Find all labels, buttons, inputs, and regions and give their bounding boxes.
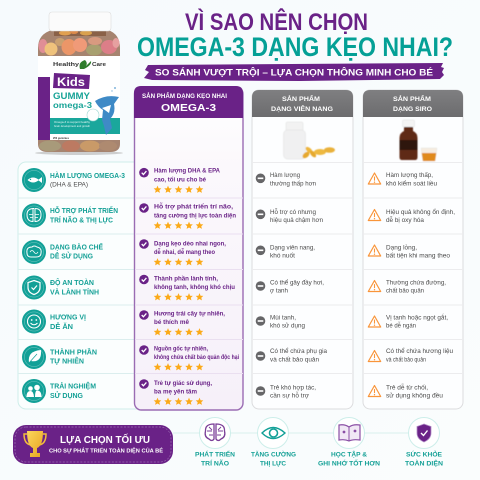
product image: gummy omega-3 jar: GUMMY <box>53 91 90 101</box>
rating: user experience: Trẻ tự giác sử dụng, <box>154 380 212 387</box>
benefit: overall health: SỨC KHỎE <box>406 450 443 458</box>
comparison: safety: ợ tanh <box>270 288 288 294</box>
comparison: brain and eye support: Hiệu quả không ổn định, <box>386 209 455 216</box>
benefit: learning and memory: HỌC TẬP & <box>331 450 367 458</box>
comparison: brain and eye support: dễ bị oxy hóa <box>386 217 425 224</box>
rating: natural ingredients: không chứa chất bảo quản độc hại <box>154 354 239 361</box>
comparison: safety: Có thể gây đầy hơi, <box>270 280 324 286</box>
icon: open book <box>339 425 360 441</box>
column heading <box>393 94 432 113</box>
feature: taste: HƯƠNG VỊ <box>50 314 86 322</box>
icon: fish <box>22 168 46 192</box>
comparison: omega-3 content: Hàm lượng <box>270 173 300 179</box>
feature: safety: VÀ LÀNH TÍNH <box>50 288 99 296</box>
feature: dosage form: DẠNG BÀO CHẾ <box>50 242 103 252</box>
rating: brain and eye support: Hỗ trợ phát triển trí não, <box>154 204 233 210</box>
comparison: user experience: Trẻ dễ từ chối, <box>386 384 428 392</box>
title: VÌ SAO NÊN CHỌN <box>185 8 368 36</box>
rating: brain and eye support: tăng cường thị lực toàn diện <box>154 212 236 220</box>
benefit: overall health <box>405 418 443 468</box>
feature: taste <box>22 310 86 334</box>
benefit: better eyesight <box>251 418 296 468</box>
benefit: brain development <box>195 418 235 468</box>
callout: best choice badge: LỰA CHỌN TỐI ƯU <box>60 432 150 446</box>
feature: brain and eye support <box>22 204 118 228</box>
feature: omega-3 content: (DHA & EPA) <box>50 182 88 188</box>
product image: gummy omega-3 jar: Healthy <box>53 62 80 68</box>
rating: omega-3 content <box>139 168 221 193</box>
rating: taste: Hương trái cây tự nhiên, <box>154 310 225 318</box>
title <box>137 8 453 62</box>
subtitle banner: SO SÁNH VƯỢT TRỘI – LỰA CHỌN THÔNG MINH CHO BÉ <box>155 66 433 78</box>
comparison: dosage form: bất tiện khi mang theo <box>386 254 451 260</box>
icon: shield <box>417 424 431 442</box>
comparison: omega-3 content: thường thấp hơn <box>270 182 316 188</box>
feature: safety: ĐỘ AN TOÀN <box>50 278 94 287</box>
comparison: taste: Vị tanh hoặc ngọt gắt, <box>386 314 448 322</box>
icon: trophy <box>24 431 46 457</box>
icon: eye <box>262 428 285 438</box>
comparison: dosage form: Dạng viên nang, <box>270 246 315 252</box>
feature: safety <box>22 276 99 300</box>
comparison: dosage form <box>256 246 315 260</box>
comparison: taste: Mùi tanh, <box>270 316 296 322</box>
product image: syrup bottle and cup <box>400 120 437 161</box>
comparison: natural ingredients: Có thể chứa phụ gia <box>270 348 328 355</box>
column heading: SẢN PHẨM <box>393 94 431 103</box>
comparison: brain and eye support <box>256 209 323 224</box>
feature: user experience <box>22 379 96 403</box>
comparison: safety: chất bảo quản <box>386 288 424 294</box>
comparison: natural ingredients: và chất bảo quản <box>270 358 319 364</box>
subtitle banner <box>144 63 444 81</box>
benefit: brain development: TRÍ NÃO <box>201 458 229 468</box>
callout: best choice badge: CHO SỰ PHÁT TRIỂN TOÀN DIỆN CỦA BÉ <box>49 446 163 454</box>
benefit: overall health: TOÀN DIỆN <box>405 458 443 468</box>
comparison: taste: bé dễ ngán <box>386 322 416 330</box>
comparison: user experience: Trẻ khó hợp tác, <box>270 386 316 392</box>
product image: gummy omega-3 jar: 250 gummies <box>53 136 69 140</box>
comparison: brain and eye support <box>368 209 455 224</box>
rating: taste <box>139 310 225 335</box>
icon: brain <box>22 204 46 228</box>
comparison: safety <box>256 280 324 294</box>
comparison: brain and eye support: hiệu quả chậm hơn <box>270 218 323 224</box>
rating: dosage form <box>139 239 226 265</box>
icon: brain <box>205 424 225 440</box>
panel: chewable gummy column <box>134 86 243 410</box>
comparison: user experience <box>256 386 316 400</box>
comparison: safety: Thường chứa đường, <box>386 280 446 286</box>
column heading <box>271 94 333 113</box>
comparison: natural ingredients <box>256 348 328 364</box>
rating: safety <box>139 275 235 300</box>
comparison: omega-3 content <box>368 173 437 188</box>
icon: leaf <box>22 345 46 369</box>
icon: smile <box>22 310 46 334</box>
comparison: taste <box>256 316 305 330</box>
comparison: dosage form: Dạng lỏng, <box>386 244 417 252</box>
column heading: DẠNG SIRO <box>393 106 432 113</box>
comparison: dosage form: khó nuốt <box>270 254 295 260</box>
rating: taste: bé thích mê <box>154 319 190 326</box>
rating: omega-3 content: Hàm lượng DHA & EPA <box>154 168 221 174</box>
product image: gummy omega-3 jar: Care <box>92 62 107 68</box>
rating: dosage form: dễ nhai, dễ mang theo <box>154 249 215 256</box>
comparison: omega-3 content <box>256 173 316 188</box>
panel: feature rows <box>18 162 148 409</box>
feature: brain and eye support: TRÍ NÃO & THỊ LỰC <box>50 216 113 224</box>
benefit: learning and memory: GHI NHỚ TỐT HƠN <box>318 458 380 468</box>
rating: natural ingredients: Nguồn gốc tự nhiên, <box>154 346 208 352</box>
column heading: DẠNG VIÊN NANG <box>271 104 333 113</box>
feature: brain and eye support: HỖ TRỢ PHÁT TRIỂN <box>50 206 118 215</box>
product image: gummy omega-3 jar: Kids <box>57 75 85 89</box>
rating: natural ingredients <box>139 345 239 370</box>
feature: taste: DỄ ĂN <box>50 322 73 331</box>
icon: gummy <box>22 240 46 264</box>
comparison: dosage form <box>368 244 451 260</box>
benefit: better eyesight: THỊ LỰC <box>260 460 286 468</box>
comparison: user experience: cần sự hỗ trợ <box>270 392 309 400</box>
comparison: omega-3 content: khó kiểm soát liều <box>386 180 437 188</box>
rating: brain and eye support <box>139 203 236 229</box>
feature: user experience: SỬ DỤNG <box>50 391 84 400</box>
icon: family <box>22 379 46 403</box>
column heading: OMEGA-3 <box>161 103 217 114</box>
callout: best choice badge <box>13 425 173 464</box>
comparison: taste <box>368 314 448 330</box>
feature: natural ingredients: TỰ NHIÊN <box>50 356 84 366</box>
rating: safety: không tanh, không khó chịu <box>154 284 235 291</box>
feature: natural ingredients: THÀNH PHẦN <box>50 346 97 356</box>
comparison: taste: khó sử dụng <box>270 322 305 330</box>
comparison: natural ingredients <box>368 348 453 364</box>
benefit: brain development: PHÁT TRIỂN <box>195 450 235 458</box>
rating: omega-3 content: cao, tối ưu cho bé <box>154 176 207 184</box>
feature: omega-3 content: HÀM LƯỢNG OMEGA-3 <box>50 171 125 180</box>
column heading: SẢN PHẨM DẠNG KẸO NHAI <box>142 91 227 100</box>
comparison: safety <box>368 280 446 294</box>
feature: dosage form <box>22 240 103 264</box>
feature: user experience: TRẢI NGHIỆM <box>50 382 96 390</box>
product image: gummy omega-3 jar: omega-3 <box>53 100 92 110</box>
rating: user experience <box>139 379 212 405</box>
rating: dosage form: Dạng kẹo dẻo nhai ngon, <box>154 240 226 248</box>
rating: user experience: ba mẹ yên tâm <box>154 388 197 396</box>
comparison: omega-3 content: Hàm lượng thấp, <box>386 173 433 179</box>
benefit: better eyesight: TĂNG CƯỜNG <box>251 450 296 458</box>
feature: omega-3 content <box>22 168 125 192</box>
product image: gummy omega-3 jar: brain development and growth <box>54 125 91 128</box>
product image: gummy omega-3 jar: Omega-3 to support healthy <box>54 121 91 124</box>
comparison: user experience <box>368 384 443 400</box>
product image: gummy omega-3 jar <box>35 12 123 155</box>
icon: shield <box>22 276 46 300</box>
product image: capsule bottle <box>284 122 335 159</box>
rating: safety: Thành phần lành tính, <box>154 276 218 282</box>
benefit: learning and memory <box>318 418 380 468</box>
comparison: brain and eye support: Hỗ trợ có nhưng <box>270 209 316 216</box>
comparison: natural ingredients: và chất bảo quản <box>386 358 426 364</box>
column heading <box>142 91 227 114</box>
panel: syrup column <box>363 90 463 409</box>
feature: natural ingredients <box>22 345 97 369</box>
comparison: user experience: sử dụng không đều <box>386 392 443 400</box>
column heading: SẢN PHẨM <box>282 94 320 103</box>
panel: capsule column <box>252 90 353 409</box>
comparison: natural ingredients: Có thể chứa hương liệu <box>386 348 453 355</box>
feature: dosage form: DỄ SỬ DỤNG <box>50 252 94 260</box>
